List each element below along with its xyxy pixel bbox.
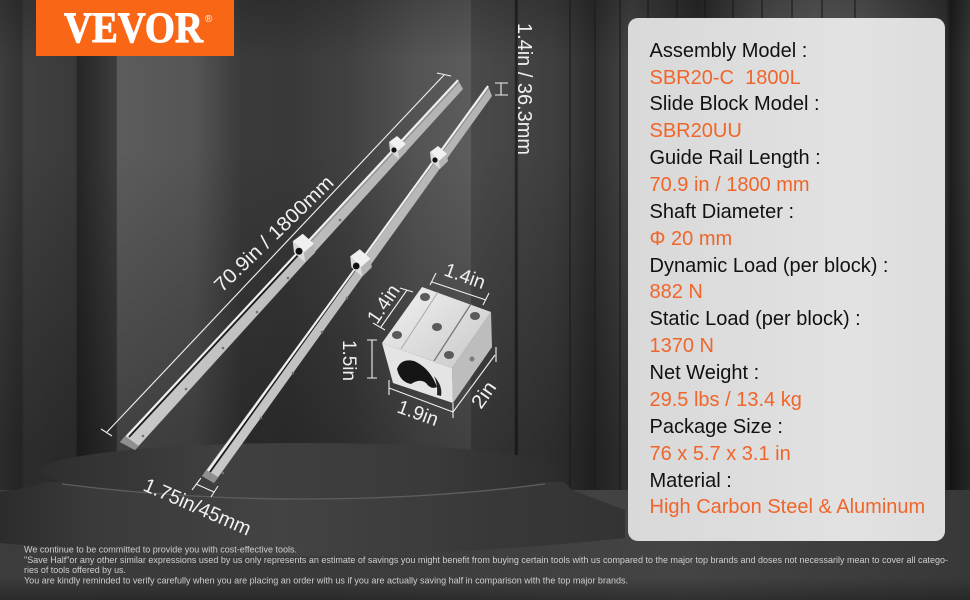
spec: net weight: Net Weight : xyxy=(650,362,759,384)
block dimension labels xyxy=(338,259,501,431)
block dimension labels: 1.4in xyxy=(441,259,488,294)
block dimension labels: 1.5in xyxy=(338,340,360,381)
spec: material xyxy=(650,470,925,518)
disclaimer: You are kindly reminded to verify carefully when you are placing an order with us if you are actually saving half in comparison with the top major brands. xyxy=(24,576,628,586)
spec: guide rail length: 70.9 in / 1800 mm xyxy=(650,174,810,196)
guide rail 2 xyxy=(202,86,492,483)
block faces xyxy=(382,287,492,403)
slider block: rail 1 upper xyxy=(389,136,407,159)
spec: slide block model xyxy=(650,93,820,142)
spec: static load: 1370 N xyxy=(650,335,714,357)
disclaimer: ries of tools offered by us. xyxy=(24,565,126,575)
disclaimer: We continue to be committed to provide you with cost-effective tools. xyxy=(24,544,297,554)
dimension: rail width: 1.75in/45mm xyxy=(140,474,254,540)
guide rail 1 xyxy=(120,80,463,450)
dimension: rail height: 1.4in / 36.3mm xyxy=(513,23,535,155)
spec: net weight: 29.5 lbs / 13.4 kg xyxy=(650,389,802,411)
spec: assembly model: SBR20-C 1800L xyxy=(650,67,801,89)
spec: shaft diameter xyxy=(650,201,794,250)
spec: package size: Package Size : xyxy=(650,416,783,438)
disclaimer xyxy=(24,544,948,586)
logo: VEVOR xyxy=(36,0,234,56)
spec: material: Material : xyxy=(650,470,732,492)
spec: dynamic load xyxy=(650,255,888,303)
spec: assembly model xyxy=(650,40,807,89)
slider block: rail 2 lower xyxy=(350,249,372,277)
spec: assembly model: Assembly Model : xyxy=(650,40,807,62)
slide block xyxy=(338,259,501,431)
spec: shaft diameter: Shaft Diameter : xyxy=(650,201,794,223)
spec: package size xyxy=(650,416,791,465)
spec: static load xyxy=(650,308,861,357)
spec: dynamic load: 882 N xyxy=(650,281,703,303)
spec: net weight xyxy=(650,362,802,411)
logo: VEVOR: VEVOR xyxy=(64,5,204,52)
spec: dynamic load: Dynamic Load (per block) : xyxy=(650,255,888,277)
block dimension labels: 1.9in xyxy=(394,396,441,431)
slider block: rail 2 upper xyxy=(430,146,448,169)
spec panel xyxy=(628,18,945,541)
block dimension lines xyxy=(367,273,496,418)
block dimension labels: 2in xyxy=(467,377,501,413)
spec: guide rail length: Guide Rail Length : xyxy=(650,147,821,169)
dimension: rail height xyxy=(495,23,535,155)
spec: static load: Static Load (per block) : xyxy=(650,308,861,330)
block dimension labels: 1.4in xyxy=(363,281,405,328)
spec: slide block model: SBR20UU xyxy=(650,120,742,142)
dimension: rail length: 70.9in / 1800mm xyxy=(210,172,338,297)
pedestal xyxy=(0,443,970,600)
spec: shaft diameter: Φ 20 mm xyxy=(650,228,732,250)
spec: package size: 76 x 5.7 x 3.1 in xyxy=(650,443,791,465)
slider block: rail 1 lower xyxy=(293,234,315,262)
disclaimer: "Save Half"or any other similar expressions used by us only represents an estimate of savings you might benefit from buying certain tools with us compared to the major top brands and doses not necessarily mean to cover all catego- xyxy=(24,555,948,565)
spec: guide rail length xyxy=(650,147,821,196)
spec: material: High Carbon Steel & Aluminum xyxy=(650,496,925,518)
spec: slide block model: Slide Block Model : xyxy=(650,93,820,115)
dimension: rail length xyxy=(101,73,451,436)
logo: VEVOR: ® xyxy=(205,14,213,25)
